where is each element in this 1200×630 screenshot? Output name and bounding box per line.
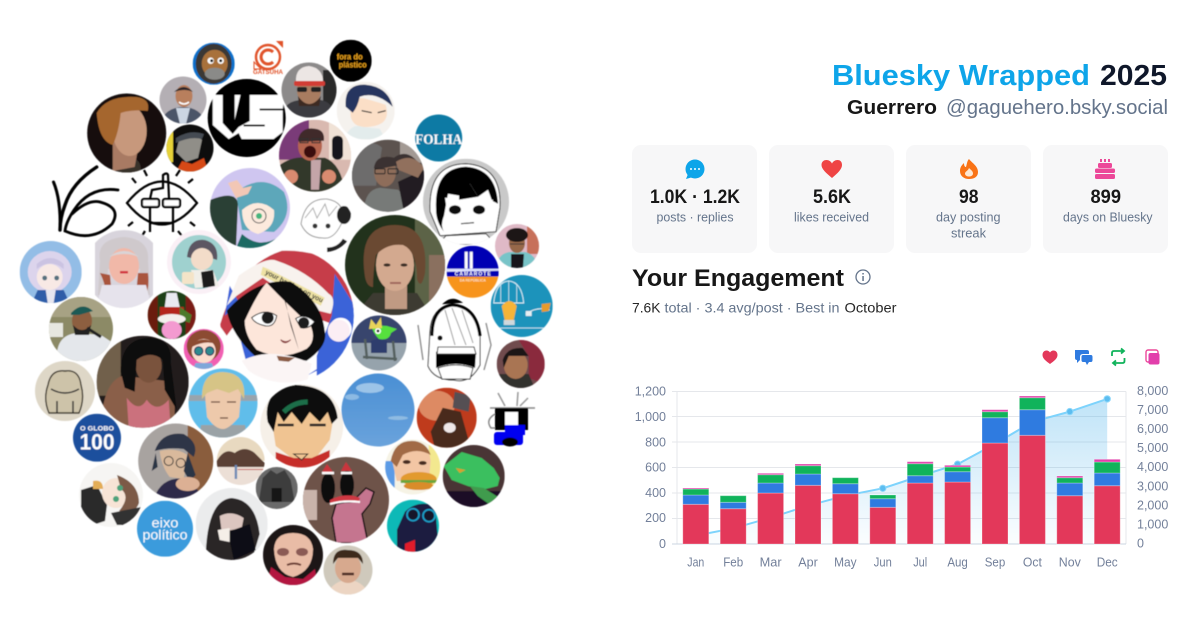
user name and handle (847, 97, 1168, 119)
icon: replies legend (1075, 350, 1092, 365)
stat value: 1.0K · 1.2K (650, 187, 740, 208)
stat label (936, 210, 1000, 240)
right axis labels: 1,000 (1137, 518, 1168, 532)
avatar: person in red photo (417, 388, 477, 448)
avatar: doodle robot with mask (489, 392, 535, 446)
avatar: cartoon girl with glasses on pink (184, 329, 224, 369)
avatar: gundam and santa (148, 291, 196, 339)
avatar: Camarote da Republica logo: CAMAROTE (455, 272, 491, 278)
stat value: 98 (959, 187, 978, 208)
user name and handle: Guerrero (847, 97, 937, 119)
bar: July (907, 462, 933, 544)
avatar: fora do plastico logo: plástico (339, 61, 367, 70)
icon: heart (822, 160, 842, 178)
stat value: 5.6K (813, 187, 851, 208)
right axis labels: 4,000 (1137, 460, 1168, 474)
right axis labels: 3,000 (1137, 480, 1168, 494)
right axis labels (1137, 384, 1168, 550)
avatar: Eixo Politico logo: político (142, 527, 188, 543)
panel: likes received (769, 145, 894, 253)
avatar: iron throne (256, 467, 298, 509)
avatar cluster (20, 40, 553, 595)
bar: December (1094, 459, 1120, 544)
month labels: Jun (874, 556, 892, 570)
avatar: anime Santa girl: your bae bae on you (264, 269, 324, 305)
cumulative area (696, 399, 1107, 544)
panel: days on Bluesky (1043, 145, 1168, 253)
month labels: Jul (913, 556, 927, 570)
avatar: anime boy on teal (167, 230, 231, 294)
stacked bars (683, 396, 1120, 544)
stat label: likes received (794, 210, 869, 224)
month labels: May (834, 556, 857, 570)
right axis labels: 0 (1137, 536, 1144, 550)
stat label: posts · replies (656, 210, 734, 224)
stat value: 899 (1090, 187, 1121, 208)
icon: info (856, 270, 870, 284)
avatar: O Globo 100 logo (73, 414, 121, 462)
heading: your engagement: Your Engagement (632, 265, 844, 292)
avatar: man in suit (159, 76, 207, 124)
bar: April (795, 464, 821, 544)
avatar: darth vader with glasses (387, 500, 439, 552)
bar: June (870, 495, 896, 544)
avatar: teal lightbulb and birdcage (491, 275, 553, 337)
avatar: anime Santa girl (220, 249, 362, 383)
avatar: anime girl with teal hair (210, 168, 290, 248)
avatar: fora do plastico logo (330, 40, 372, 82)
month labels: Sep (985, 556, 1005, 570)
chart legend icons (1042, 348, 1160, 366)
stat label: days on Bluesky (1063, 210, 1153, 224)
month labels: Nov (1059, 556, 1082, 570)
month labels: Oct (1023, 556, 1042, 570)
icon: flame (960, 159, 978, 179)
engagement summary (632, 300, 897, 316)
bar: May (832, 478, 858, 544)
avatar: anime sleeping man (337, 82, 395, 140)
bar: January (683, 488, 709, 544)
avatar: green crocodile (443, 445, 505, 509)
panel: posts and replies (632, 145, 757, 253)
left axis labels: 0 (659, 537, 666, 551)
avatar: Camarote da Republica logo (447, 246, 499, 299)
avatar: anime girl lavender hair (20, 241, 82, 303)
avatar: fora do plastico logo: fora do (337, 53, 363, 62)
header (832, 60, 1168, 119)
avatar: girl covering face (196, 488, 268, 560)
avatar: blonde woman (95, 229, 153, 309)
month labels: Feb (723, 556, 743, 570)
avatar: manga character screaming (418, 300, 491, 381)
title: Bluesky Wrapped (832, 60, 1090, 92)
avatar: young man brown hair (87, 93, 167, 180)
month labels: Apr (798, 556, 818, 570)
combined bar and line chart (635, 384, 1168, 570)
avatar: anime man with glasses on hand (138, 423, 214, 499)
avatar: Folha logo: FOLHA (415, 132, 462, 148)
left axis labels (635, 384, 666, 551)
avatar: man with cap and microphone (49, 297, 113, 361)
avatar: brown-haired man with glasses and cap (281, 62, 337, 118)
avatar: man with red scarf (263, 525, 323, 585)
left axis labels: 400 (645, 486, 666, 500)
avatar: Camarote da Republica logo: DA REPÚBLICA (460, 279, 486, 283)
avatar: pink creature with santa hats (303, 457, 389, 543)
avatar: man with red hair (497, 340, 545, 388)
avatar: manga man black hair (260, 384, 344, 468)
icon: quotes legend (1146, 350, 1160, 364)
avatar: man shouting with microphone (279, 120, 351, 192)
avatar: statue head (166, 124, 214, 172)
month labels: Mar (760, 556, 782, 570)
avatar: Eixo Politico logo: eixo (152, 515, 179, 531)
engagement summary: 7.6K (632, 300, 661, 316)
avatar: sketch anime with headphones (297, 196, 353, 252)
left axis labels: 800 (645, 436, 666, 450)
icon: likes legend (1042, 350, 1058, 364)
cumulative line (696, 396, 1110, 536)
avatar: Eixo Politico logo (137, 501, 193, 557)
avatar: green frog in chair (351, 315, 407, 371)
stat label: day posting (936, 210, 1000, 224)
month labels (687, 556, 1118, 570)
avatar: woman with black hair (97, 336, 189, 428)
left axis labels: 600 (645, 460, 666, 474)
avatar: sky with clouds (342, 374, 414, 446)
icon: reposts legend (1112, 348, 1124, 366)
title: 2025 (1100, 60, 1167, 92)
avatar: Gatsuha logo: GATSUHA (253, 70, 284, 76)
right axis labels: 8,000 (1137, 384, 1168, 398)
avatar: man with long brown hair (345, 215, 445, 315)
icon: speech bubble (686, 160, 704, 179)
avatar: man with curly hair (495, 224, 539, 268)
avatar: O Globo 100 logo: 100 (80, 430, 114, 455)
chart grid (672, 392, 1126, 544)
avatar: anime girl with brown hair sideways (79, 463, 143, 527)
stat label: streak (951, 226, 986, 240)
avatar: Folha logo (415, 114, 463, 162)
avatar: blurred landscape (216, 436, 266, 486)
avatar: anime blond man (188, 368, 258, 438)
avatar: cartoon man on blue (193, 43, 235, 85)
avatar: manga girl black bob (423, 159, 509, 245)
avatar: man with moustache (323, 545, 373, 595)
avatar: Gatsuha logo (253, 41, 284, 76)
left axis labels: 200 (645, 511, 666, 525)
bar: November (1057, 476, 1083, 544)
right axis labels: 7,000 (1137, 403, 1168, 417)
icon: cake (1095, 159, 1115, 179)
panel: day posting streak (906, 145, 1031, 253)
avatar: anime girl with burger (385, 439, 441, 495)
month labels: Jan (687, 556, 704, 570)
user name and handle: @gaguehero.bsky.social (946, 97, 1168, 119)
month labels: Aug (947, 556, 968, 570)
avatar: man with glasses lying down (351, 139, 425, 213)
right axis labels: 2,000 (1137, 498, 1168, 512)
avatar: VS logo (208, 79, 286, 157)
avatar: eye and finger logo (127, 170, 197, 236)
bar: February (720, 496, 746, 544)
bar: March (758, 473, 784, 544)
month labels: Dec (1097, 556, 1118, 570)
left axis labels: 1,200 (635, 384, 666, 398)
avatar: V6 logo (54, 167, 118, 236)
left axis labels: 1,000 (635, 410, 666, 424)
engagement summary: October (844, 300, 897, 316)
right axis labels: 6,000 (1137, 422, 1168, 436)
avatar: O Globo 100 logo: O GLOBO (80, 426, 114, 433)
engagement summary: total · 3.4 avg/post · Best in (664, 300, 840, 316)
bar: August (945, 465, 971, 544)
bar: October (1019, 396, 1045, 544)
bar: September (982, 410, 1008, 544)
right axis labels: 5,000 (1137, 441, 1168, 455)
avatar: toad statue sketch (35, 361, 95, 421)
